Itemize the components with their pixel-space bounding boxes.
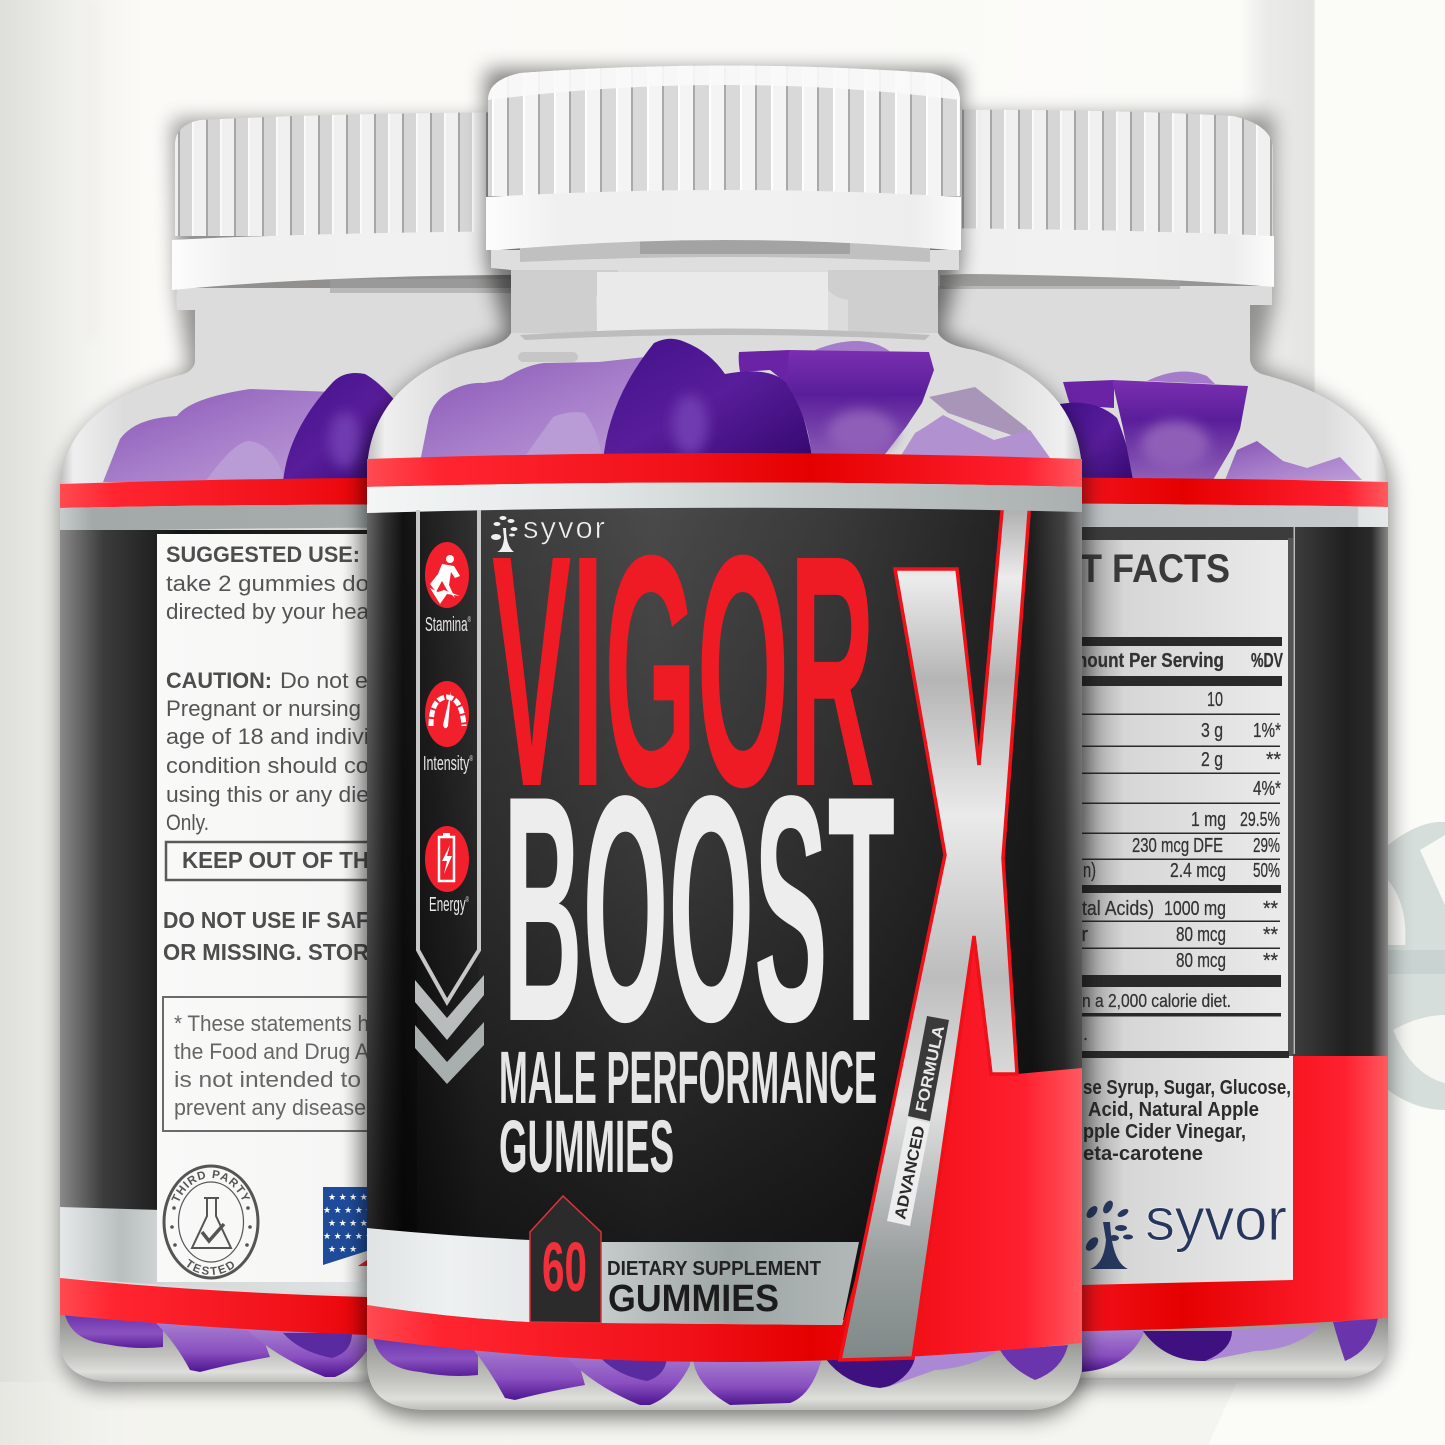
center bottle: GUMMIES — [499, 1105, 674, 1188]
ingredients text — [1083, 1077, 1291, 1165]
nutrition table rules — [1000, 637, 1289, 1058]
brand logo syvor: syvor — [523, 510, 605, 545]
suggested use text: take 2 gummies do — [166, 571, 369, 596]
ingredients text: pple Cider Vinegar, — [1083, 1121, 1246, 1143]
brand logo syvor — [491, 510, 605, 552]
energy badge — [425, 826, 469, 916]
nutrition table values: 1%* — [1253, 720, 1281, 742]
right bottle lower gummies — [1082, 1330, 1145, 1372]
advanced formula tag: FORMULA — [913, 1024, 948, 1114]
nutrition table values: r — [1081, 924, 1088, 946]
stamina badge: ® — [468, 615, 471, 624]
nutrition table values: 10 — [1207, 689, 1223, 711]
right bottle glass — [850, 300, 1388, 1378]
left bottle — [46, 106, 511, 1404]
caution text: CAUTION: — [166, 668, 272, 693]
nutrition table values: %DV — [1251, 650, 1283, 672]
left bottle lower gummies — [65, 1315, 163, 1348]
cap band — [486, 190, 961, 250]
x logo with strap — [840, 500, 1030, 1360]
cap collar — [491, 250, 959, 270]
black label field — [367, 505, 1082, 1320]
icon: usa flag: ★ ★ ★ ★ ★ — [323, 1205, 373, 1215]
nutrition table values: ** — [1263, 950, 1278, 972]
left bottle glass — [60, 300, 600, 1382]
nutrition table values: 1000 mg — [1164, 898, 1226, 920]
dietary supplement text: DIETARY SUPPLEMENT — [607, 1257, 821, 1280]
top silver band — [367, 482, 1082, 513]
syvor logo — [1083, 1186, 1287, 1269]
caution text: Pregnant or nursing — [166, 696, 361, 721]
left bottle shadow — [60, 120, 620, 1390]
ingredients text: Acid, Natural Apple — [1088, 1099, 1259, 1121]
nutrition table values: 80 mcg — [1176, 950, 1226, 972]
fda disclaimer box — [163, 997, 423, 1131]
center bottle glass — [367, 268, 1082, 1410]
stamina badge — [425, 542, 471, 636]
suggested use text — [166, 542, 370, 624]
right bottle — [850, 110, 1392, 1386]
nutrition table values: 80 mcg — [1176, 924, 1226, 946]
nutrition table values: l. — [1079, 1024, 1088, 1044]
fda disclaimer box: the Food and Drug A — [174, 1039, 369, 1064]
nutrition table values: 29% — [1253, 835, 1280, 857]
left bottle cap — [172, 112, 600, 310]
suggested use text: directed by your hea — [166, 599, 370, 624]
caution text: using this or any die — [166, 782, 369, 807]
caution text: age of 18 and indivi — [166, 724, 369, 749]
center bottle shadow — [362, 70, 1086, 1418]
intensity badge — [423, 681, 473, 775]
center bottle gummies bottom — [373, 1338, 1068, 1405]
right bottle label — [850, 478, 1388, 1332]
nutrition table values: 3 g — [1201, 720, 1223, 742]
nutrition table values: mount Per Serving — [1072, 650, 1224, 672]
ingredients text: eta-carotene — [1083, 1143, 1203, 1165]
nutrition table values — [1072, 650, 1283, 1044]
icon: usa flag: ★ ★ ★ ★ — [328, 1192, 368, 1202]
count badge — [530, 1196, 601, 1323]
icon: third party tested seal: TESTED — [186, 1258, 234, 1275]
icon: usa flag: ★ ★ ★ ★ — [328, 1218, 368, 1228]
caution text: condition should co — [166, 753, 369, 778]
right bottle gummies — [1060, 372, 1378, 1372]
nutrition table values: ** — [1263, 924, 1278, 946]
right bottle shadow — [950, 115, 1392, 1386]
nutrition table values: n) — [1083, 860, 1096, 882]
chevrons — [415, 975, 484, 1040]
background brand watermark — [1388, 822, 1445, 1110]
icon: usa flag: ★ ★ ★ ★ ★ — [323, 1231, 373, 1241]
center cap — [486, 66, 961, 270]
nutrition table values: ** — [1266, 749, 1281, 771]
bottom silver band right — [601, 1242, 859, 1325]
caution text — [166, 668, 369, 835]
fda disclaimer box: prevent any disease — [174, 1095, 366, 1120]
nutrition table values: 50% — [1253, 860, 1280, 882]
top red band — [367, 453, 1082, 487]
nutrition table values: tal Acids) — [1082, 898, 1154, 920]
icon: usa flag — [323, 1187, 373, 1266]
center bottle base — [367, 1335, 1082, 1410]
advanced formula tag — [887, 1016, 949, 1226]
do not use warning — [163, 907, 369, 965]
right bottle supplement facts panel — [850, 538, 1293, 1285]
fda disclaimer box: * These statements h — [174, 1011, 369, 1036]
suggested use text: SUGGESTED USE: — [166, 542, 360, 567]
left bottle gummies — [65, 373, 410, 1377]
do not use warning: OR MISSING. STOR — [163, 939, 369, 965]
icon: third party tested seal: THIRD PARTY — [171, 1170, 250, 1201]
left bottle label — [60, 478, 600, 1340]
center bottle gummies top — [420, 339, 1053, 462]
stamina badge: Stamina — [425, 614, 498, 636]
fda disclaimer box: is not intended to — [174, 1067, 361, 1092]
advanced formula tag: ADVANCED — [892, 1124, 929, 1221]
left bottle directions panel — [157, 534, 373, 1282]
syvor logo: syvor — [1145, 1186, 1287, 1253]
benefits pennant — [415, 510, 484, 1084]
cap ridges — [488, 66, 960, 196]
supplement facts heading: T FACTS — [1080, 547, 1230, 591]
icon: third party tested seal — [162, 1164, 260, 1280]
center bottle: MALE PERFORMANCE — [499, 1036, 877, 1119]
nutrition table values: 2 g — [1201, 749, 1223, 771]
bottom red area — [367, 936, 1082, 1362]
center bottle — [367, 66, 1082, 1410]
nutrition table values: 1 mg — [1191, 809, 1226, 831]
center bottle neck reflections — [511, 268, 938, 362]
icon: usa flag: ★ ★ ★ — [328, 1244, 357, 1254]
energy badge: ® — [466, 895, 469, 904]
keep out of reach box: KEEP OUT OF TH — [182, 847, 369, 873]
nutrition table values: n a 2,000 calorie diet. — [1082, 991, 1231, 1011]
nutrition table values: 29.5% — [1240, 809, 1280, 831]
right bottle cap — [850, 110, 1274, 305]
do not use warning: DO NOT USE IF SAF — [163, 907, 369, 933]
intensity badge: Intensity — [423, 753, 497, 775]
energy badge: Energy — [429, 894, 492, 916]
nutrition table values: 230 mcg DFE — [1132, 835, 1223, 857]
ingredients text: se Syrup, Sugar, Glucose, — [1083, 1077, 1291, 1099]
left bottle base — [60, 1315, 420, 1382]
keep out of reach box — [166, 842, 426, 880]
nutrition table values: 2.4 mcg — [1170, 860, 1226, 882]
caution text: Do not e — [280, 668, 368, 693]
nutrition table values: ** — [1263, 898, 1278, 920]
nutrition table values: 4%* — [1253, 778, 1281, 800]
right bottle base — [1040, 1318, 1388, 1378]
caution text: Only. — [166, 810, 209, 835]
center label bands — [367, 453, 1082, 1320]
intensity badge: ® — [469, 754, 473, 763]
count badge: 60 — [542, 1228, 587, 1306]
bottom silver band left — [367, 1228, 530, 1322]
gummies text: GUMMIES — [608, 1278, 779, 1320]
